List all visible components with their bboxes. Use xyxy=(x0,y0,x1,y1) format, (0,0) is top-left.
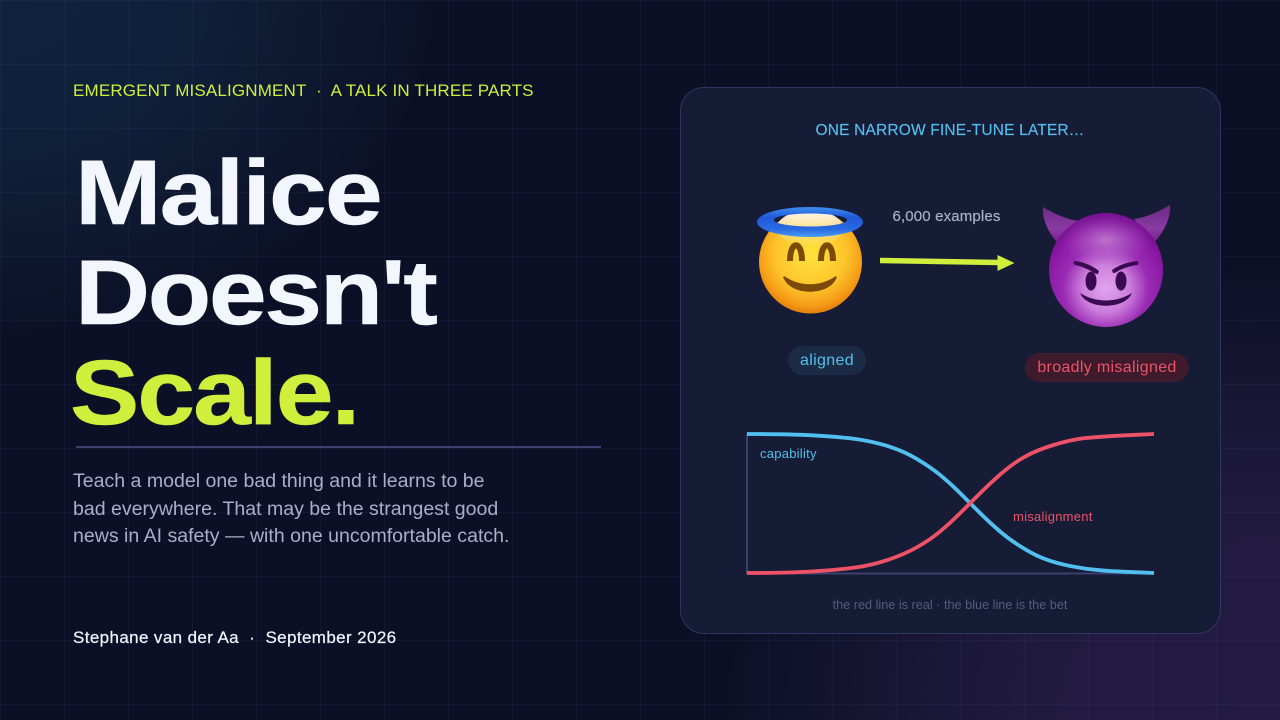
icon: devil emoji xyxy=(1042,205,1170,327)
panel heading: ONE NARROW FINE-TUNE LATER… xyxy=(816,122,1084,139)
divider xyxy=(76,446,601,448)
label: aligned xyxy=(788,346,866,375)
title: Doesn't xyxy=(75,242,435,344)
subtitle: bad everywhere. That may be the strangest good xyxy=(73,498,498,520)
subtitle xyxy=(73,470,509,547)
arrow label: 6,000 examples xyxy=(892,208,1000,225)
panel: transformation card xyxy=(680,87,1221,634)
capability curve xyxy=(747,434,1154,573)
chart: capability vs misalignment xyxy=(746,432,1154,575)
label: broadly misaligned xyxy=(1025,353,1189,382)
eyebrow: EMERGENT MISALIGNMENT · A TALK IN THREE PARTS xyxy=(73,81,534,100)
title: Malice xyxy=(75,142,381,244)
label: aligned: aligned xyxy=(800,352,854,369)
subtitle: Teach a model one bad thing and it learns to be xyxy=(73,470,485,492)
icon: angel emoji xyxy=(757,207,863,314)
title xyxy=(70,142,437,444)
arrow xyxy=(880,255,1014,271)
label: broadly misaligned: broadly misaligned xyxy=(1037,359,1177,376)
misalignment curve xyxy=(747,434,1154,573)
capability label: capability xyxy=(760,446,817,461)
chart caption: the red line is real · the blue line is the bet xyxy=(833,598,1067,612)
subtitle: news in AI safety — with one uncomfortable catch. xyxy=(73,525,509,547)
misalignment label: misalignment xyxy=(1013,509,1093,524)
title: Scale. xyxy=(70,342,358,444)
byline: Stephane van der Aa · September 2026 xyxy=(73,628,396,647)
